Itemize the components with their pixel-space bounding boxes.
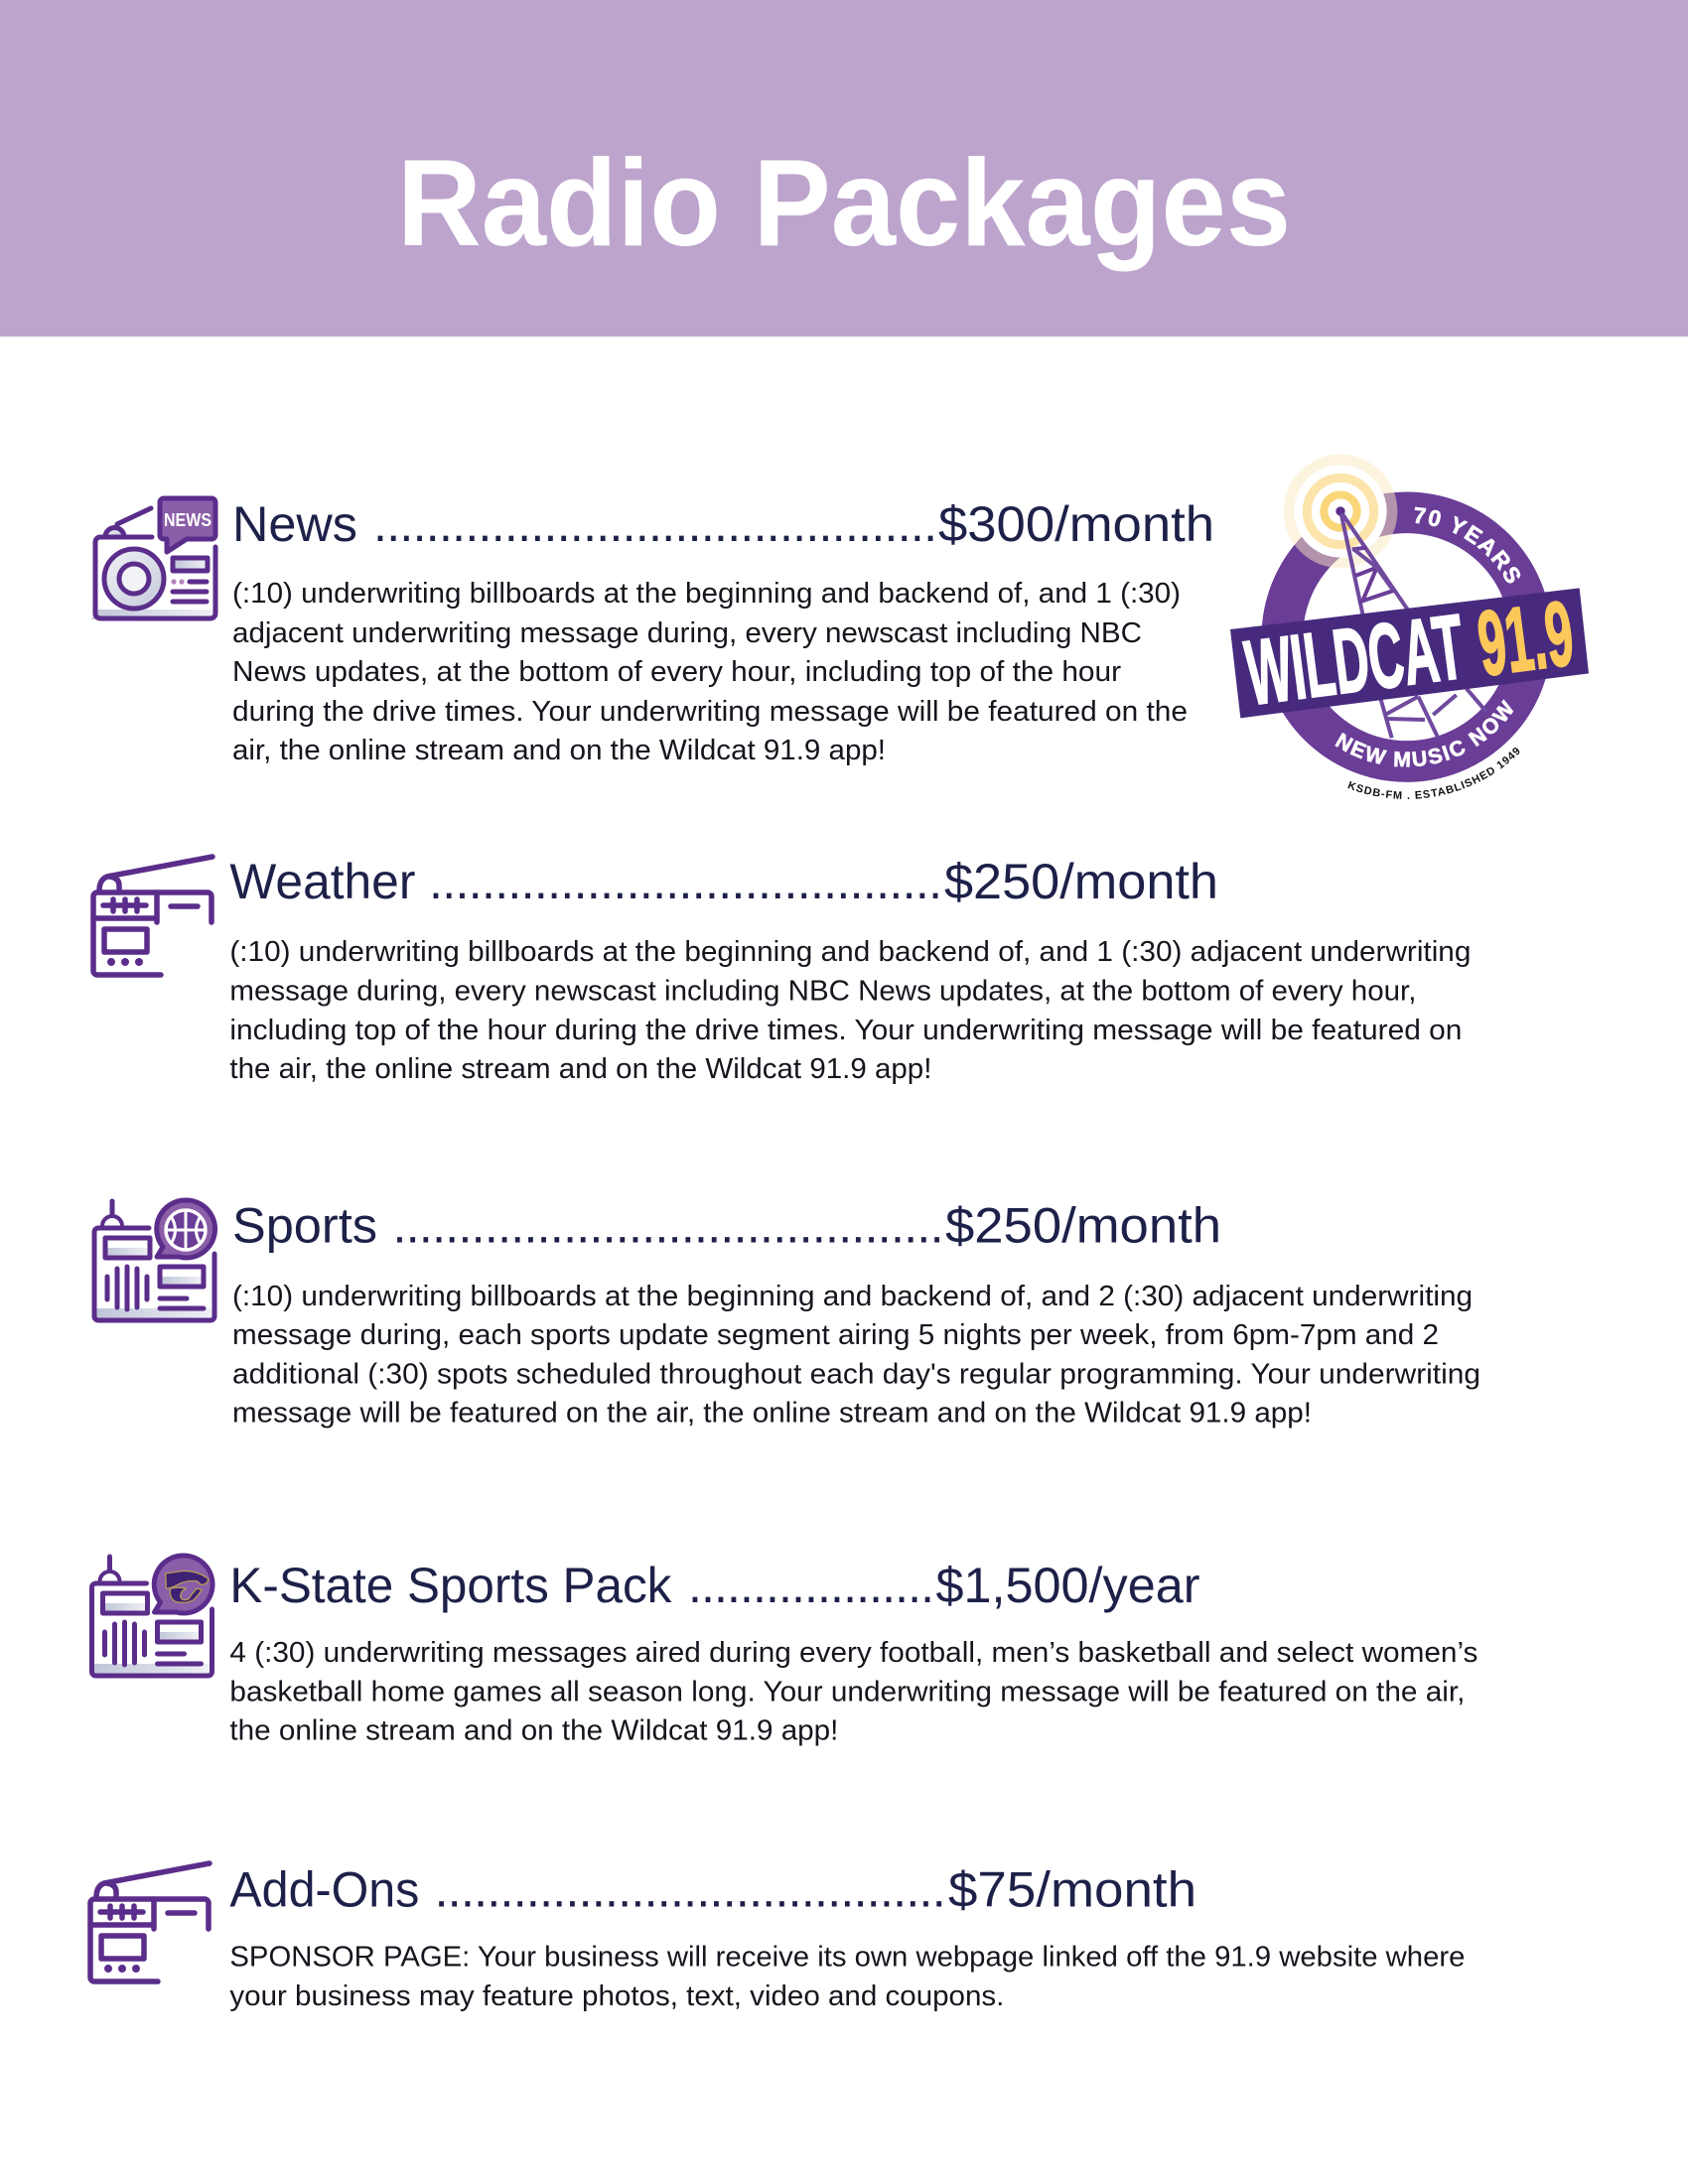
text block: Sports description: (:10) underwriting billboards at the beginning and backend of, and 2 (:30) adjacent underwriting bbox=[232, 1281, 1473, 1312]
heading: Add-Ons price bbox=[229, 1862, 1196, 1918]
text block: Add-Ons description: SPONSOR PAGE: Your business will receive its own webpage linked off the 91.9 website where bbox=[229, 1942, 1465, 1974]
logo frequency: 91.9 bbox=[1473, 581, 1579, 696]
text block: News description: News updates, at the bottom of every hour, including top of the hour bbox=[232, 656, 1121, 688]
heading: News price bbox=[232, 496, 1214, 552]
heading: Weather price: ....................................... bbox=[429, 854, 942, 909]
icon: add-ons radio bbox=[90, 1863, 210, 1981]
text block: Sports description: message will be featured on the air, the online stream and on the Wildcat 91.9 app! bbox=[232, 1398, 1312, 1430]
heading: K-State price: K-State Sports Pack bbox=[229, 1558, 672, 1613]
text block: News description: during the drive times. Your underwriting message will be featured on the bbox=[232, 696, 1188, 728]
text block: News description: (:10) underwriting billboards at the beginning and backend of, and 1 (:30) bbox=[232, 578, 1181, 610]
text block: Weather description: (:10) underwriting billboards at the beginning and backend of, and 1 (:30) adjacent underwriting bbox=[229, 936, 1471, 968]
text block: Weather description: including top of the hour during the drive times. Your underwriting message will be featured on bbox=[229, 1015, 1462, 1046]
heading: Sports price: $250/month bbox=[945, 1197, 1221, 1253]
panel: K-State Sports Pack bbox=[91, 1556, 1477, 1747]
icon: radio with news bubble bbox=[91, 498, 215, 619]
text block: K-State description bbox=[229, 1637, 1477, 1747]
panel: Weather package bbox=[93, 854, 1471, 1085]
title: Radio Packages bbox=[397, 135, 1291, 272]
heading: Weather price: $250/month bbox=[944, 854, 1218, 909]
text block: Weather description: message during, every newscast including NBC News updates, at the bottom of every hour, bbox=[229, 975, 1416, 1007]
panel: Sports package bbox=[94, 1197, 1480, 1430]
text block: Add-Ons description bbox=[229, 1942, 1465, 2012]
heading: News price: $300/month bbox=[938, 496, 1214, 552]
heading: News price: ........................................... bbox=[373, 496, 937, 552]
radio waves bbox=[1289, 460, 1392, 563]
heading: Sports price bbox=[232, 1197, 1221, 1253]
text block: News description: air, the online stream and on the Wildcat 91.9 app! bbox=[232, 735, 886, 766]
icon: basketball bbox=[166, 1210, 206, 1250]
heading: K-State price: $1,500/year bbox=[935, 1558, 1199, 1613]
text block: News description: adjacent underwriting message during, every newscast including NBC bbox=[232, 617, 1142, 649]
icon: powercat bbox=[166, 1570, 209, 1602]
heading: News price: News bbox=[232, 496, 357, 552]
text block: Weather description bbox=[229, 936, 1471, 1085]
heading: Weather price: Weather bbox=[229, 854, 415, 909]
text block: Weather description: the air, the online stream and on the Wildcat 91.9 app! bbox=[229, 1053, 931, 1085]
icon: weather radio bbox=[93, 857, 212, 975]
panel: News package bbox=[91, 496, 1214, 766]
header banner bbox=[0, 0, 1688, 337]
text block: Add-Ons description: your business may feature photos, text, video and coupons. bbox=[229, 1980, 1004, 2012]
text block: Sports description: additional (:30) spots scheduled throughout each day's regular programming. Your underwriting bbox=[232, 1358, 1480, 1390]
text block: News description bbox=[232, 578, 1188, 766]
logo banner bbox=[1230, 588, 1589, 718]
text block: Sports description: message during, each sports update segment airing 5 nights per week, from 6pm-7pm and 2 bbox=[232, 1319, 1439, 1351]
logo arc text: established: KSDB-FM . ESTABLISHED 1949 bbox=[1347, 748, 1519, 799]
text block: K-State description: the online stream and on the Wildcat 91.9 app! bbox=[229, 1715, 838, 1747]
logo wordmark: WILDCAT bbox=[1240, 595, 1470, 725]
tower bbox=[1341, 513, 1486, 738]
heading: Weather price bbox=[229, 854, 1218, 909]
heading: Add-Ons price: ....................................... bbox=[435, 1862, 946, 1918]
heading: K-State price: ................... bbox=[688, 1558, 934, 1613]
logo arc text: new music now: NEW MUSIC NOW bbox=[1335, 699, 1513, 767]
icon: radio with powercat bubble bbox=[91, 1556, 212, 1676]
heading: Sports price: .......................................... bbox=[393, 1197, 943, 1253]
logo ring bbox=[1282, 512, 1531, 761]
logo: Wildcat 91.9 bbox=[1230, 455, 1589, 799]
logo arc text: 70 years: 70 YEARS bbox=[1414, 506, 1521, 584]
heading: Add-Ons price: Add-Ons bbox=[229, 1862, 419, 1918]
text block: K-State description: basketball home games all season long. Your underwriting message will be featured on the air, bbox=[229, 1676, 1465, 1707]
text block: K-State description: 4 (:30) underwriting messages aired during every football, men’s basketball and select women’s bbox=[229, 1637, 1477, 1669]
heading: Add-Ons price: $75/month bbox=[948, 1862, 1196, 1918]
heading: K-State price bbox=[229, 1558, 1199, 1613]
icon: radio with news bubble: NEWS bbox=[164, 510, 211, 530]
heading: Sports price: Sports bbox=[232, 1197, 377, 1253]
text block: Sports description bbox=[232, 1281, 1480, 1430]
icon: radio with basketball bubble bbox=[94, 1200, 215, 1320]
panel: Add-Ons bbox=[90, 1862, 1465, 2012]
